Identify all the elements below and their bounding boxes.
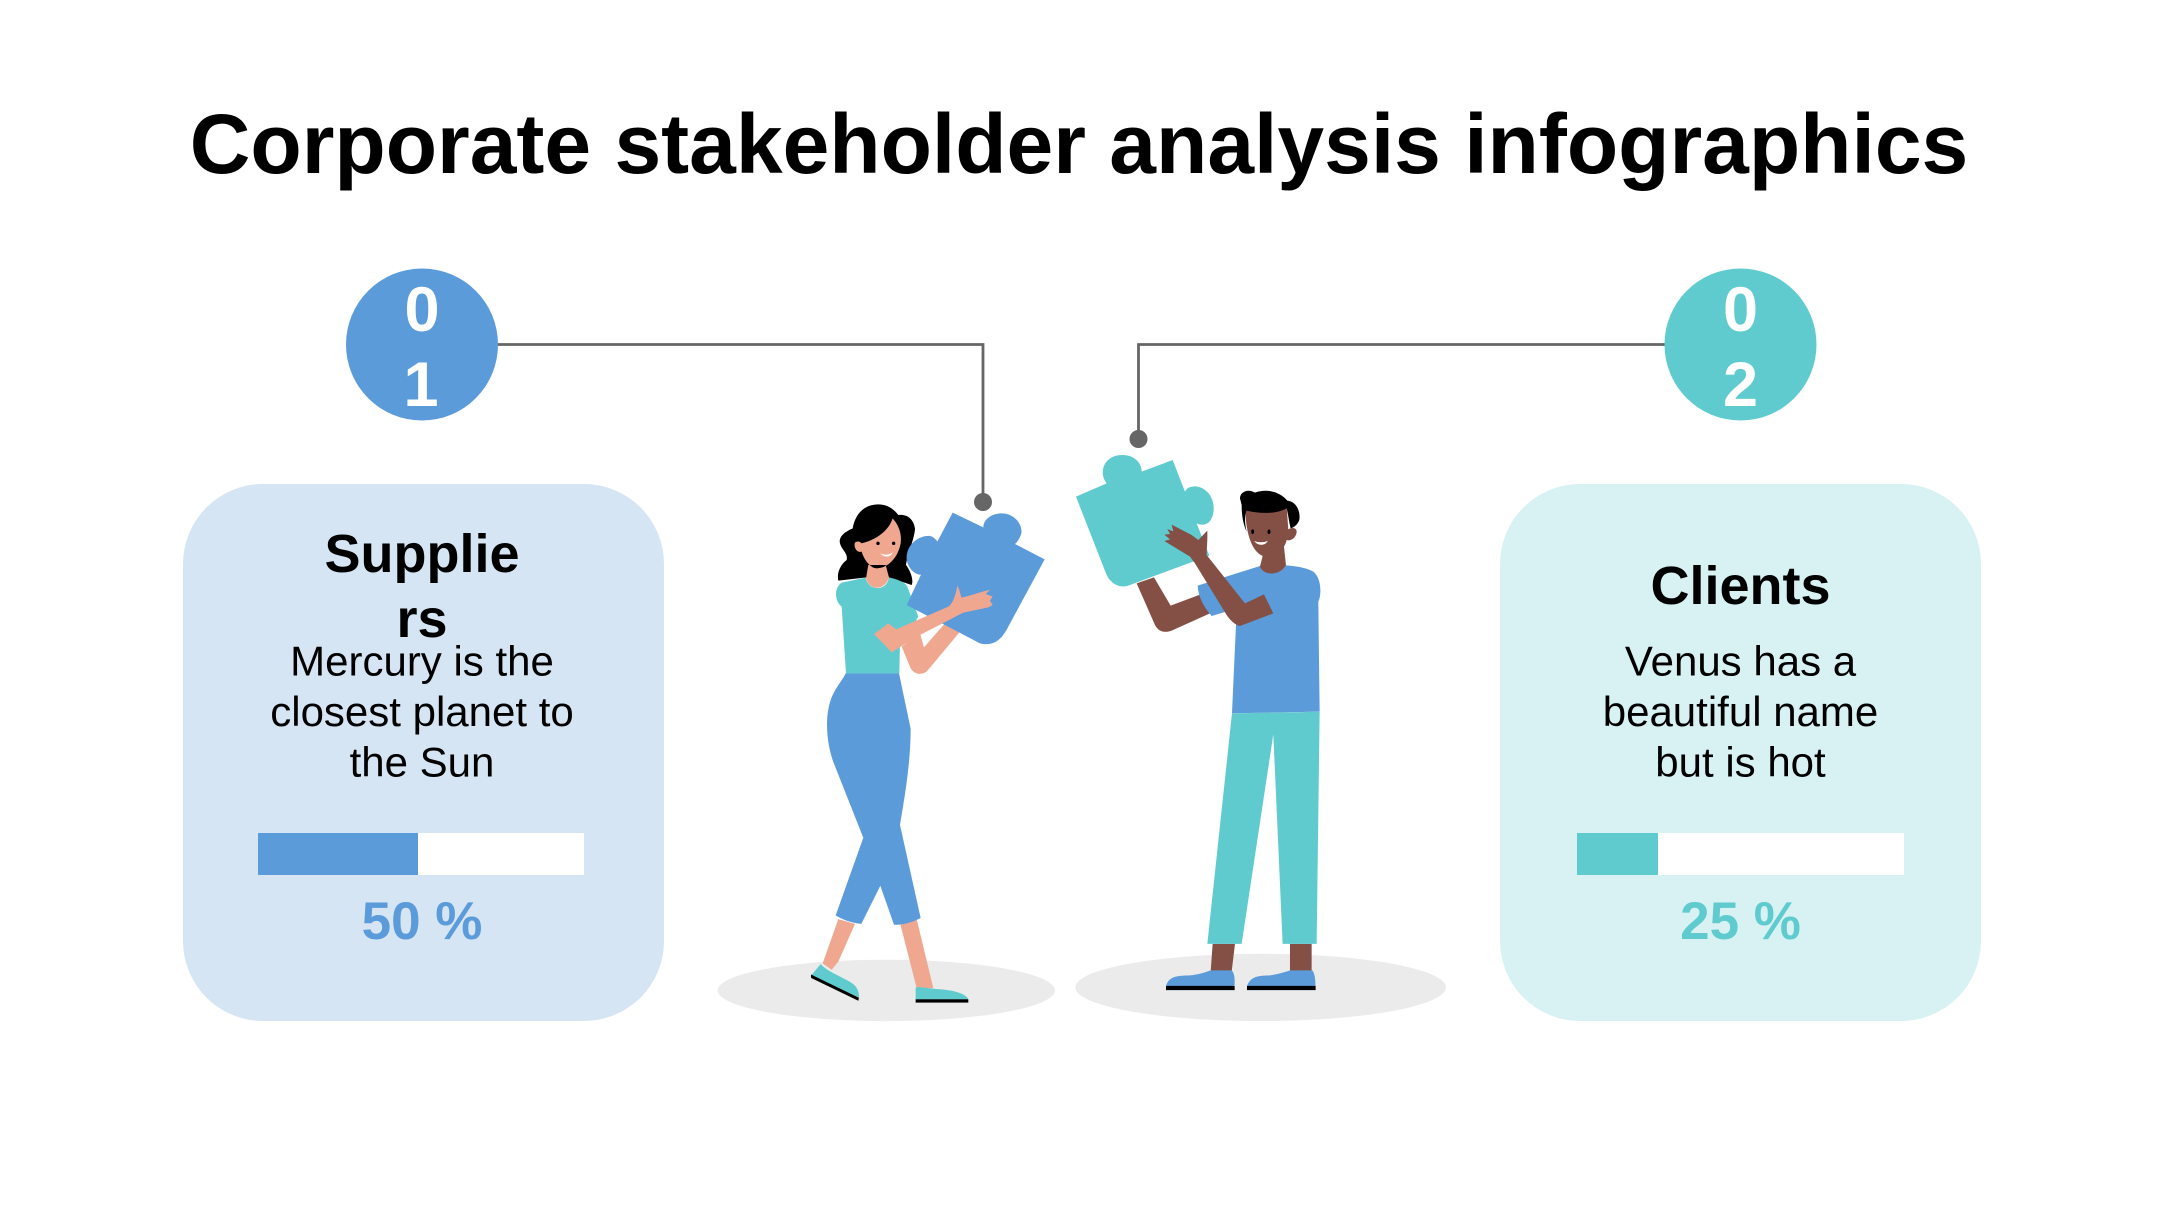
heading: suppliers: Supplie <box>324 524 520 584</box>
upper arm and hand <box>874 586 993 652</box>
text: clients description: beautiful name <box>1603 688 1878 735</box>
shoes <box>811 964 968 1003</box>
hair <box>838 504 915 585</box>
number badge 01: 1 <box>403 350 439 420</box>
number badge 02: 2 <box>1723 350 1758 420</box>
puzzle piece <box>1076 455 1214 586</box>
number badge 01: 0 <box>404 275 440 345</box>
connector: 01 to woman puzzle <box>497 344 992 511</box>
panel: clients <box>1500 484 1981 1021</box>
ground shadow <box>1075 954 1446 1021</box>
illustration: woman holding puzzle piece <box>718 504 1055 1021</box>
text: clients description: but is hot <box>1655 738 1826 786</box>
trousers <box>1207 712 1320 944</box>
hair <box>1240 491 1300 532</box>
progress bar: 50 percent <box>258 833 584 875</box>
ground shadow <box>718 960 1055 1021</box>
puzzle piece <box>907 513 1045 644</box>
text: suppliers description: Mercury is the <box>290 638 554 684</box>
trousers <box>827 673 921 925</box>
legs <box>823 919 933 988</box>
heading: clients: Clients <box>1650 556 1831 616</box>
neck and head <box>1245 507 1297 573</box>
facial features <box>876 542 895 556</box>
title: Corporate stakeholder analysis infographics <box>190 97 1968 191</box>
facial features <box>1251 529 1270 545</box>
number badge 01 <box>346 268 498 420</box>
panel: suppliers <box>183 484 664 1021</box>
neck and face <box>855 518 901 588</box>
shirt <box>1198 565 1320 713</box>
back arm <box>1137 577 1210 632</box>
number badge 02 <box>1664 268 1816 420</box>
value: 50 percent: 50 % <box>362 892 482 951</box>
progress bar: 25 percent <box>1577 833 1904 875</box>
shoes <box>1166 970 1316 990</box>
illustration: man holding puzzle piece <box>1075 455 1446 1021</box>
heading: suppliers: rs <box>396 589 448 649</box>
value: 25 percent: 25 % <box>1680 892 1801 951</box>
number badge 02: 0 <box>1723 275 1758 345</box>
front arm and hand <box>1164 525 1273 626</box>
shirt <box>836 577 918 673</box>
text: suppliers description: the Sun <box>350 738 494 786</box>
text: suppliers description: closest planet to <box>270 688 574 735</box>
legs <box>1211 944 1312 972</box>
text: clients description: Venus has a <box>1625 638 1857 684</box>
connector: 02 to man puzzle <box>1130 344 1665 448</box>
lower arm <box>902 623 960 674</box>
